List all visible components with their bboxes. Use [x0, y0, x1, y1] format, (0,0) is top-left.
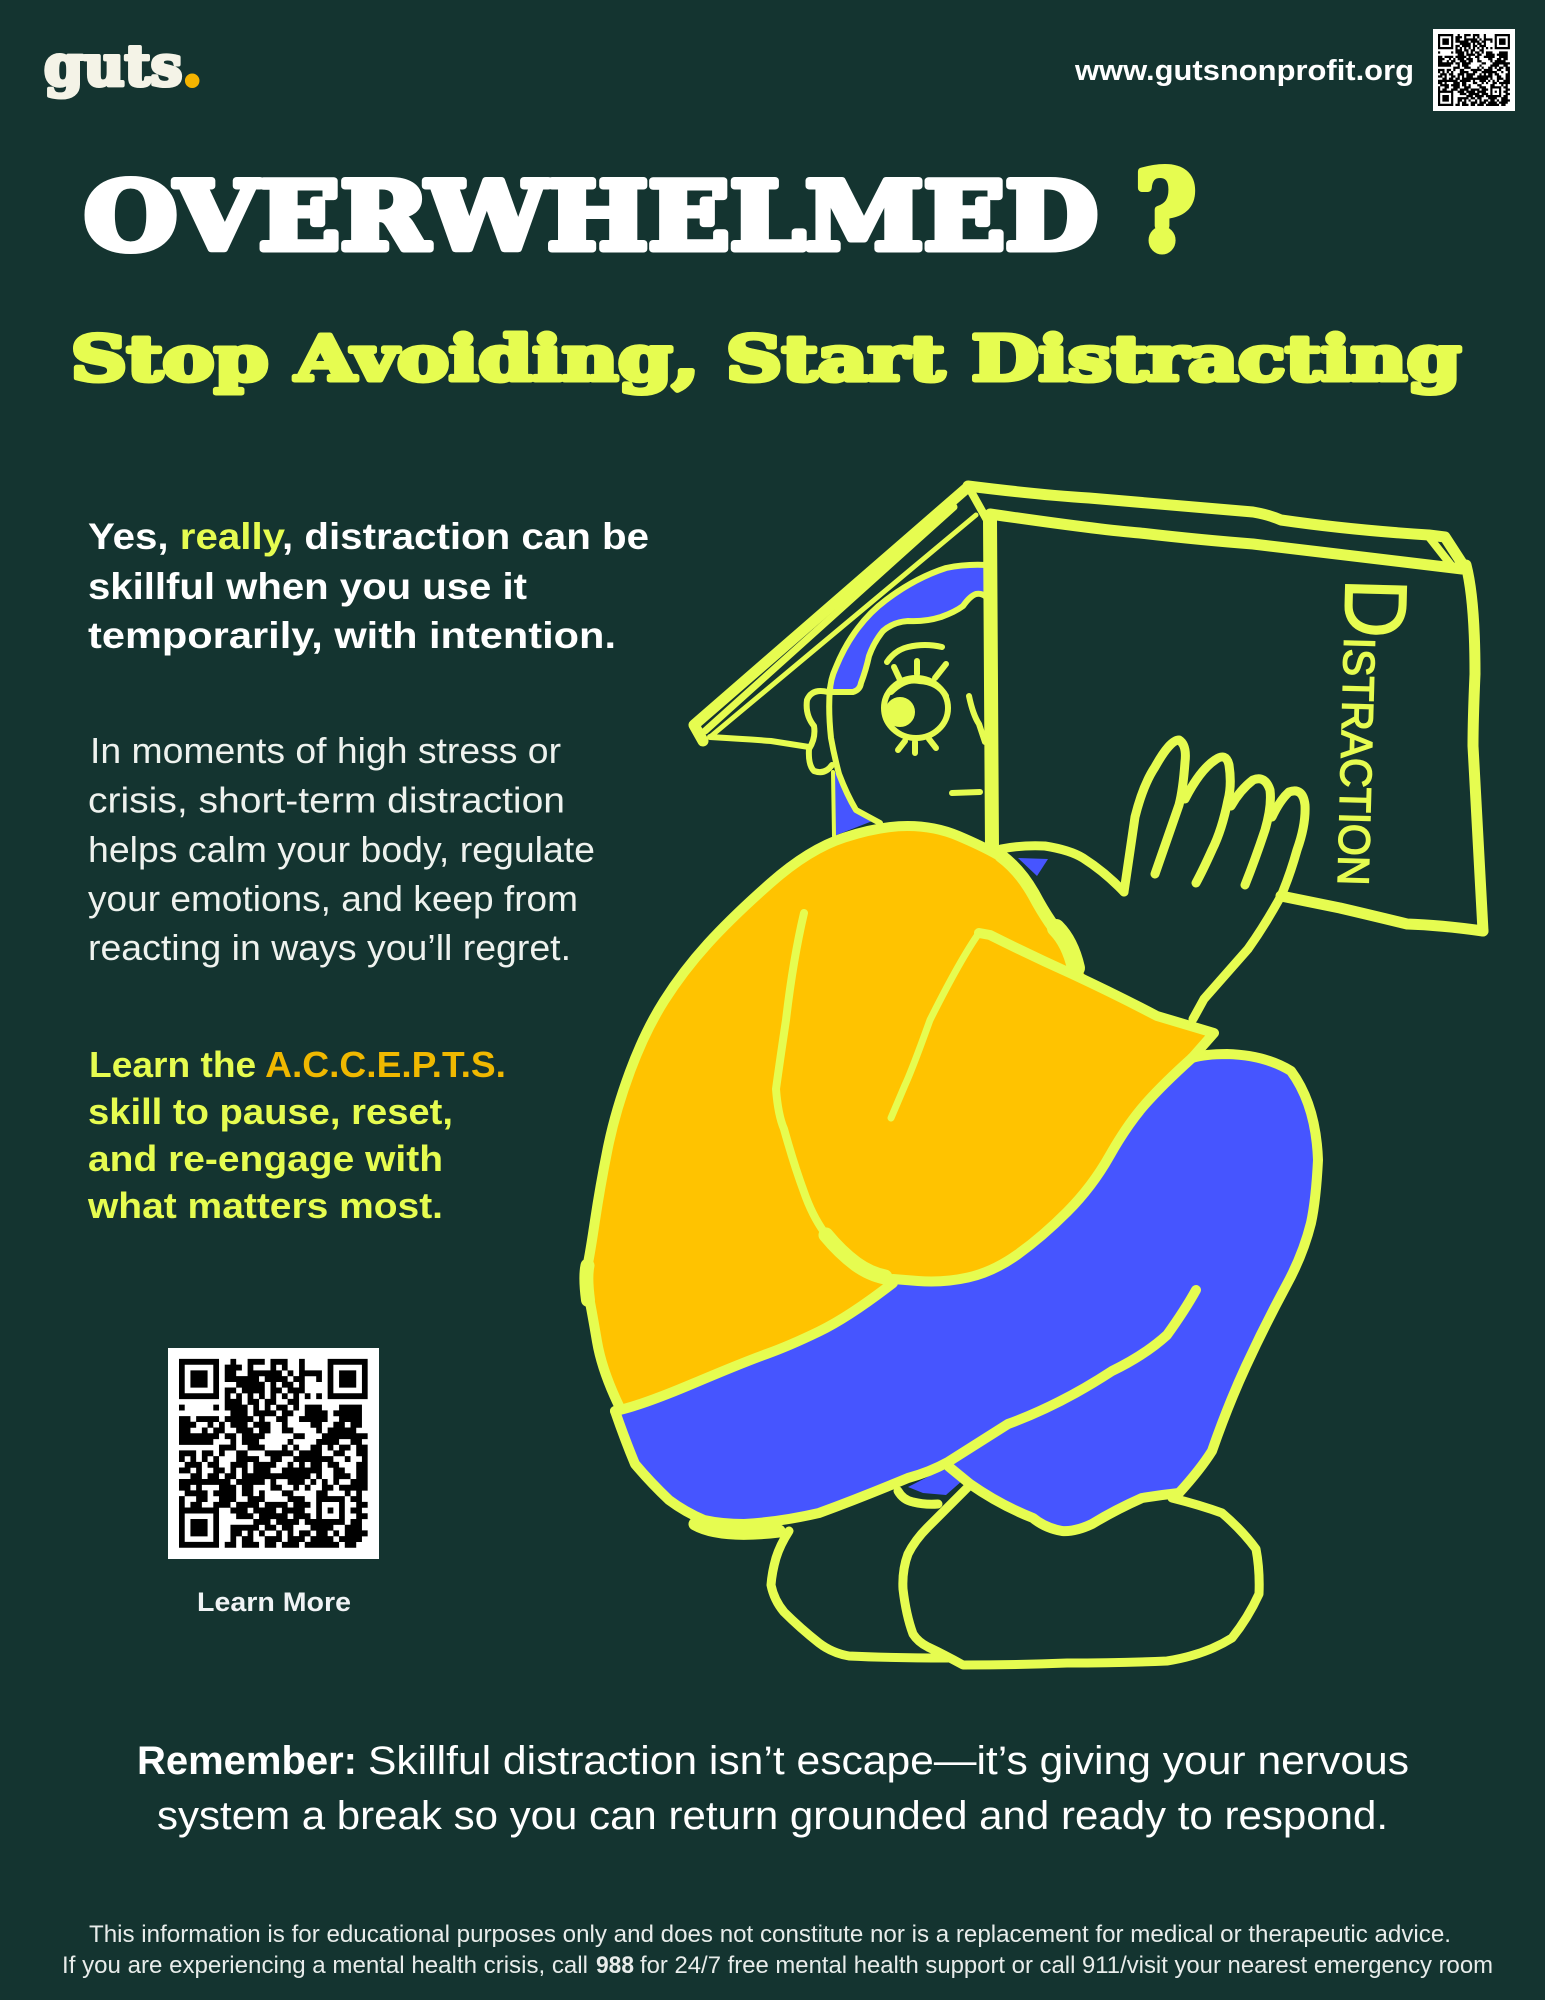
closing reminder: system a break so you can return grounded and ready to respond. — [157, 1794, 1388, 1838]
call to action text: Learn the A.C.C.E.P.T.S. — [89, 1044, 506, 1085]
small trouser gap — [908, 1469, 963, 1495]
call to action text: skill to pause, reset, — [88, 1091, 453, 1132]
closing reminder: Remember: — [137, 1739, 357, 1783]
explanation paragraph: reacting in ways you’ll regret. — [88, 927, 571, 968]
title question mark: ? — [1135, 147, 1196, 275]
intro text block: temporarily, with intention. — [88, 615, 616, 656]
book title: DISTRACTION — [1319, 578, 1426, 887]
explanation paragraph: your emotions, and keep from — [88, 878, 578, 919]
disclaimer: 988 — [596, 1952, 634, 1979]
intro text block: skillful when you use it — [88, 566, 527, 607]
top QR code — [1433, 29, 1515, 111]
disclaimer: If you are experiencing a mental health crisis, call — [62, 1952, 588, 1979]
closing reminder: Skillful distraction isn’t escape—it’s giving your nervous — [368, 1739, 1409, 1783]
explanation paragraph — [88, 730, 595, 968]
body outlines — [586, 826, 1318, 1533]
explanation paragraph: In moments of high stress or — [90, 730, 561, 771]
explanation paragraph: helps calm your body, regulate — [88, 829, 595, 870]
website url: www.gutsnonprofit.org — [1074, 55, 1414, 87]
book — [694, 486, 1483, 931]
illustration: person hiding behind a book — [586, 486, 1483, 1665]
call to action text — [87, 1044, 506, 1226]
hand — [1001, 740, 1305, 1019]
intro text block — [88, 516, 649, 656]
intro text block: Yes, really, distraction can be — [88, 516, 649, 557]
main QR code — [168, 1348, 379, 1559]
subtitle: Stop Avoiding, Start Distracting — [71, 322, 1461, 395]
call to action text: what matters most. — [87, 1185, 443, 1226]
title: overwhelmed: OVERWHELMED — [84, 162, 1098, 272]
sweater — [586, 826, 1214, 1408]
collar — [1018, 858, 1048, 876]
neck — [834, 772, 875, 836]
feet — [771, 1487, 1259, 1665]
learn more label: Learn More — [197, 1587, 351, 1617]
closing reminder — [137, 1739, 1409, 1838]
explanation paragraph: crisis, short-term distraction — [88, 780, 565, 820]
logo: guts.: guts. — [44, 33, 202, 99]
disclaimer: This information is for educational purposes only and does not constitute nor is a replacement for medical or therapeutic advice. — [89, 1921, 1451, 1948]
head and face — [710, 565, 986, 836]
disclaimer — [62, 1921, 1493, 1979]
call to action text: and re-engage with — [88, 1138, 443, 1179]
trousers — [615, 1054, 1318, 1531]
disclaimer: for 24/7 free mental health support or call 911/visit your nearest emergency room — [640, 1952, 1493, 1979]
